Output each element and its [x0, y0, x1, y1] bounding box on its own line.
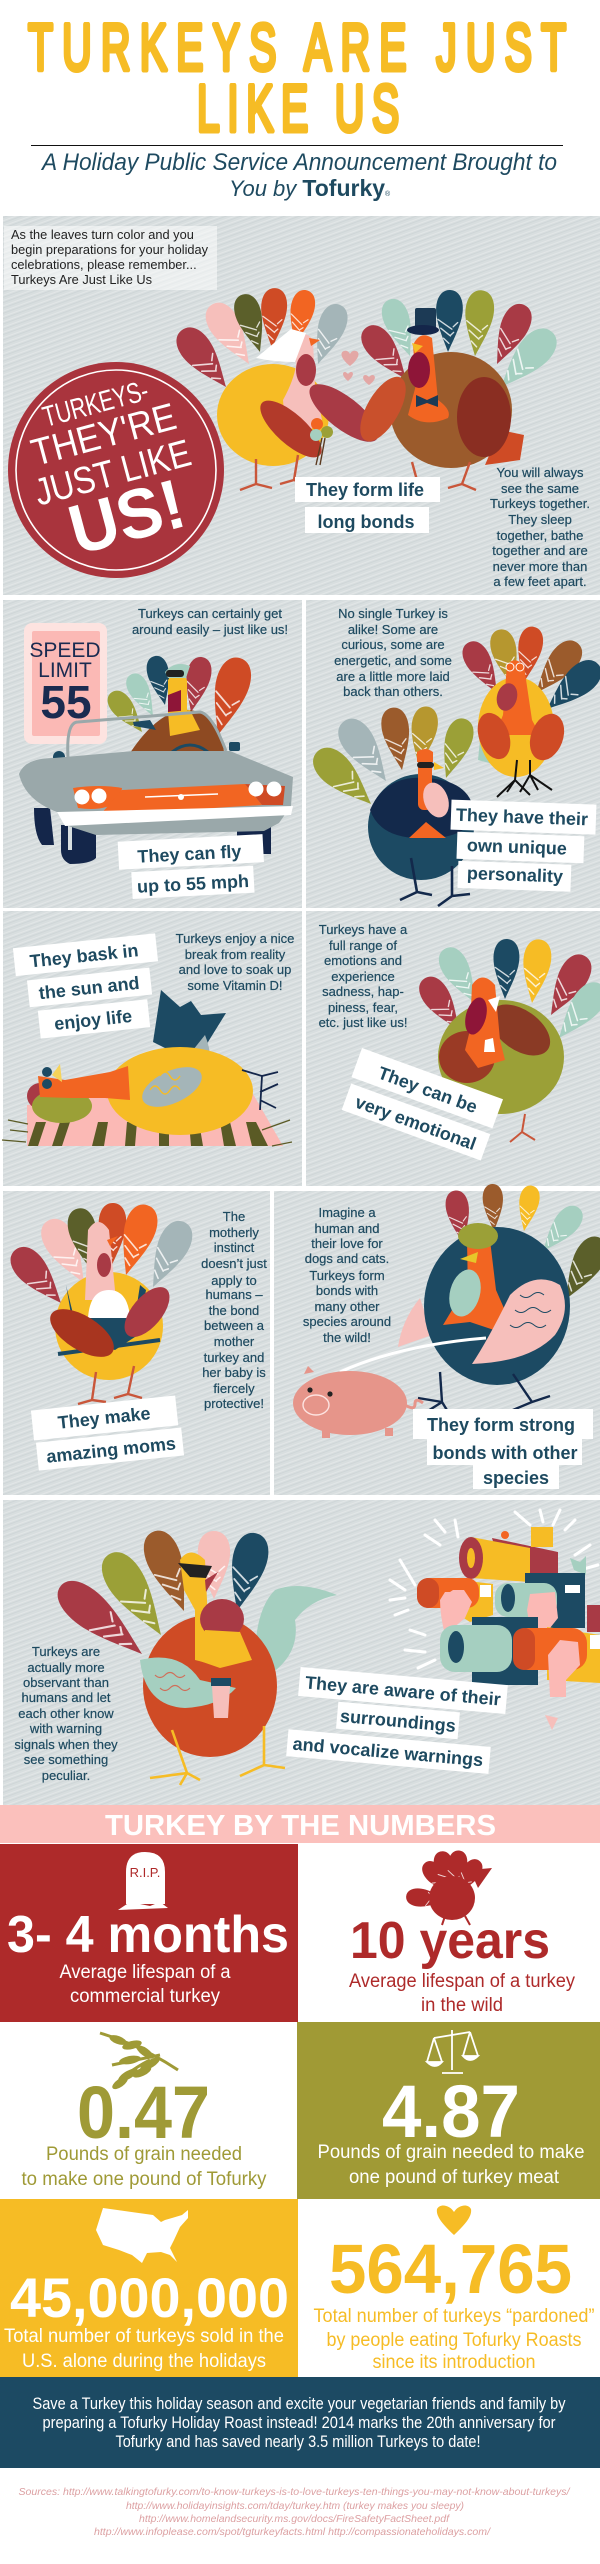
label: they have their own unique personality: They have their: [456, 805, 588, 829]
text: vitamin D: some Vitamin D!: [187, 978, 283, 993]
text: imagine a human: the wild!: [323, 1330, 371, 1345]
heading: turkey by the numbers: TURKEY BY THE NUMBERS: [105, 1810, 496, 1842]
text: vitamin D: [176, 931, 294, 993]
panel: very emotional: [306, 911, 600, 1186]
text: range of emotions: experience: [331, 969, 395, 984]
badge: THEY'RE: [27, 396, 181, 475]
text: no single turkey: are a little more laid: [336, 669, 450, 684]
label: they can be very emotional: They can be: [375, 1063, 480, 1117]
text: no single turkey: [334, 606, 452, 699]
stat: 45,000,000: U.S. alone during the holidays: [22, 2351, 266, 2372]
title: TURKEYS ARE JUST: [28, 10, 566, 84]
label: they make amazing moms: amazing moms: [45, 1433, 177, 1467]
call to action: Tofurky and has saved nearly 3.5 million Turkeys to date!: [116, 2432, 480, 2451]
text: more observant: signals when they: [14, 1737, 118, 1752]
stat: 0.47: Pounds of grain needed: [46, 2144, 242, 2165]
text: get around easily: around easily – just like us!: [132, 622, 288, 637]
sources: Sources: http://www.talkingtofurky.com/to-know-turkeys-is-to-love-turkeys-ten-things-you-may-not-know-about-turkeys/: [18, 2486, 571, 2498]
label: they can fly up to 55 mph: up to 55 mph: [137, 871, 249, 897]
text: motherly instinct: turkey and: [204, 1350, 264, 1365]
title: [28, 10, 566, 145]
text: same turkeys together: together and are: [492, 543, 588, 558]
label: they can be very emotional: [342, 1048, 503, 1160]
text: get around easily: [132, 606, 288, 637]
text: imagine a human: species around: [303, 1314, 391, 1329]
text: range of emotions: sadness, hap-: [322, 984, 404, 999]
icon: speed limit sign: SPEED: [29, 639, 101, 662]
text: imagine a human: Turkeys form: [309, 1268, 385, 1283]
text: motherly instinct: apply to: [211, 1273, 257, 1288]
text: motherly instinct: motherly: [209, 1225, 259, 1240]
call to action: [0, 2377, 600, 2468]
text: more observant: humans and let: [22, 1690, 111, 1705]
stat: 45,000,000: Total number of turkeys sold in the: [4, 2326, 284, 2347]
stat: 564,765: 564,765: [329, 2230, 572, 2308]
title: LIKE US: [197, 71, 399, 145]
label: they form strong bonds with other species: species: [483, 1468, 549, 1488]
panel: bask in the sun: [2, 911, 302, 1186]
stat: 10 years: in the wild: [421, 1995, 503, 2016]
panel: bonds with other species: [274, 1184, 600, 1495]
icon: speed limit sign: 55: [40, 676, 92, 728]
text: motherly instinct: instinct: [214, 1240, 255, 1255]
text: more observant: each other know: [18, 1706, 114, 1721]
text: same turkeys together: never more than: [493, 559, 587, 574]
stat: 0.47: to make one pound of Tofurky: [22, 2169, 267, 2190]
label: they form strong bonds with other species: bonds with other: [433, 1443, 577, 1463]
label: aware of surroundings and vocalize warnings: [286, 1667, 508, 1774]
stat: 45,000,000: 45,000,000: [10, 2266, 289, 2329]
label: they bask in the sun and enjoy life: enjoy life: [53, 1006, 133, 1034]
label: they bask in the sun and enjoy life: the sun and: [38, 973, 140, 1003]
text: motherly instinct: mother: [214, 1334, 255, 1349]
stat: 3-4 months: Average lifespan of a: [60, 1962, 231, 1983]
stat: 3-4 months: [0, 1844, 298, 2022]
panel: unique personality: [306, 600, 600, 908]
text: same turkeys together: Turkeys together.: [490, 496, 590, 511]
stat: 45,000,000: [0, 2199, 298, 2377]
panel: amazing moms: [3, 1191, 270, 1495]
label: they form strong bonds with other species: [413, 1409, 593, 1489]
text: motherly instinct: the bond: [209, 1303, 259, 1318]
label: they form life long bonds: They form life: [306, 480, 424, 500]
icon: heart: [437, 2205, 471, 2235]
label: aware of surroundings and vocalize warnings: and vocalize warnings: [292, 1734, 484, 1770]
text: same turkeys together: see the same: [501, 481, 579, 496]
stat: 0.47: 0.47: [77, 2071, 210, 2154]
stat: 10 years: Average lifespan of a turkey: [349, 1971, 575, 1992]
text: imagine a human: [303, 1205, 391, 1345]
text: more observant: see something: [24, 1752, 108, 1767]
intro text: begin preparations for your holiday: [11, 242, 209, 257]
intro text: Turkeys Are Just Like Us: [11, 272, 152, 287]
stat: 4.87: [297, 2022, 600, 2199]
icon: tombstone: R.I.P.: [130, 1865, 160, 1880]
label: they make amazing moms: They make: [57, 1403, 151, 1433]
stat: 4.87: one pound of turkey meat: [349, 2167, 560, 2188]
badge: JUST LIKE: [30, 432, 196, 514]
label: they bask in the sun and enjoy life: They bask in: [29, 940, 139, 972]
text: range of emotions: piness, fear,: [328, 1000, 398, 1015]
panel: they can fly: [3, 600, 302, 908]
illustration: driving turkey: [103, 653, 256, 753]
text: same turkeys together: You will always: [497, 465, 584, 480]
stat: 3-4 months: commercial turkey: [70, 1986, 220, 2007]
stat: 564,765: [314, 2205, 594, 2373]
label: aware of surroundings and vocalize warnings: surroundings: [339, 1706, 457, 1736]
stat: 4.87: Pounds of grain needed to make: [318, 2142, 584, 2163]
sources: http://www.infoplease.com/spot/tgturkeyfacts.html http://compassionateholidays.com/: [94, 2526, 491, 2538]
panel: life long bonds: [3, 216, 600, 595]
icon: speed limit sign: [24, 623, 107, 744]
stat: 564,765: since its introduction: [372, 2352, 536, 2373]
text: motherly instinct: her baby is: [202, 1365, 266, 1380]
text: get around easily: Turkeys can certainly get: [138, 606, 282, 621]
text: motherly instinct: between a: [204, 1318, 265, 1333]
illustration: convertible car: [19, 712, 293, 864]
illustration: emotional turkey: [413, 938, 600, 1142]
illustration: navy turkey with pig: [293, 1184, 600, 1438]
subtitle: A Holiday Public Service Announcement Brought to: [40, 149, 557, 176]
text: no single turkey: energetic, and some: [334, 653, 452, 668]
badge: US!: [61, 464, 193, 570]
label: aware of surroundings and vocalize warnings: They are aware of their: [304, 1672, 501, 1710]
text: range of emotions: full range of: [329, 938, 397, 953]
text: motherly instinct: doesn’t just: [201, 1256, 267, 1271]
text: imagine a human: bonds with: [316, 1283, 378, 1298]
label: they make amazing moms: [31, 1395, 184, 1471]
intro text: As the leaves turn color and you: [11, 227, 194, 242]
text: range of emotions: Turkeys have a: [319, 922, 408, 937]
sources: http://www.homelandsecurity.ms.gov/docs/FireSafetyFactSheet.pdf: [139, 2513, 450, 2525]
text: more observant: Turkeys are: [32, 1644, 100, 1659]
text: no single turkey: alike! Some are: [348, 622, 438, 637]
panel: aware of surroundings: [3, 1500, 600, 1805]
illustration: cameras with hands: [390, 1510, 600, 1730]
stat: 4.87: 4.87: [382, 2070, 520, 2153]
text: motherly instinct: humans –: [205, 1287, 263, 1302]
text: same turkeys together: together, bathe: [497, 528, 583, 543]
subtitle: [40, 149, 557, 201]
text: no single turkey: No single Turkey is: [338, 606, 448, 621]
text: more observant: actually more: [27, 1660, 105, 1675]
label: they can fly up to 55 mph: [118, 834, 266, 900]
sources: http://www.holidayinsights.com/tday/turkey.htm (turkey makes you sleepy): [126, 2500, 464, 2512]
icon: scales: [427, 2030, 478, 2073]
illustration: navy turkey: [306, 705, 478, 906]
text: motherly instinct: fiercely: [213, 1381, 255, 1396]
text: motherly instinct: [201, 1209, 267, 1411]
text: range of emotions: [319, 922, 408, 1030]
label: they form life long bonds: long bonds: [318, 512, 414, 532]
label: they form strong bonds with other species: They form strong: [427, 1415, 575, 1435]
illustration: groom turkey: [351, 289, 564, 492]
label: they have their own unique personality: [448, 800, 596, 893]
text: imagine a human: their love for: [311, 1236, 383, 1251]
text: imagine a human: many other: [314, 1299, 380, 1314]
heading: turkey by the numbers: [0, 1805, 600, 1843]
badge: [8, 362, 224, 578]
label: they bask in the sun and enjoy life: [13, 933, 158, 1039]
stat: 0.47: [22, 2033, 267, 2190]
icon: turkey silhouette: [405, 1849, 492, 1925]
text: no single turkey: back than others.: [343, 684, 443, 699]
text: same turkeys together: They sleep: [508, 512, 572, 527]
stat: 10 years: 10 years: [350, 1912, 550, 1970]
label: they have their own unique personality: personality: [467, 863, 563, 887]
label: they have their own unique personality: own unique: [467, 835, 567, 859]
text: no single turkey: curious, some are: [341, 637, 445, 652]
sources: [18, 2486, 571, 2538]
text: imagine a human: dogs and cats.: [305, 1251, 389, 1266]
icon: speed limit sign: LIMIT: [38, 659, 92, 682]
illustration: sunbathing turkey: [2, 990, 292, 1146]
stat: 10 years: [349, 1849, 575, 2016]
text: same turkeys together: [490, 465, 590, 589]
text: vitamin D: break from reality: [185, 947, 286, 962]
stat: 3-4 months: 3- 4 months: [7, 1906, 289, 1964]
text: range of emotions: emotions and: [324, 953, 402, 968]
intro text: [4, 226, 217, 290]
text: imagine a human: Imagine a: [318, 1205, 376, 1220]
subtitle: You by Tofurky®: [229, 175, 391, 201]
illustration: mother turkey: [4, 1201, 199, 1404]
label: they can fly up to 55 mph: They can fly: [137, 841, 242, 867]
text: vitamin D: Turkeys enjoy a nice: [176, 931, 294, 946]
icon: map of the U.S.: [96, 2208, 188, 2263]
text: range of emotions: etc. just like us!: [319, 1015, 407, 1030]
text: motherly instinct: The: [223, 1209, 245, 1224]
badge: TURKEYS-: [39, 375, 152, 434]
text: more observant: [14, 1644, 118, 1783]
label: they form life long bonds: [295, 477, 440, 533]
text: same turkeys together: a few feet apart.: [493, 574, 587, 589]
icon: hearts: [342, 351, 375, 385]
icon: tombstone: [118, 1852, 168, 1910]
illustration: observant turkey: [49, 1525, 337, 1785]
illustration: bride turkey: [169, 287, 387, 490]
text: motherly instinct: protective!: [204, 1396, 264, 1411]
label: they can be very emotional: very emotional: [353, 1092, 479, 1154]
intro text: celebrations, please remember...: [11, 257, 197, 272]
text: more observant: observant than: [23, 1675, 109, 1690]
text: more observant: with warning: [29, 1721, 102, 1736]
illustration: yellow turkey: [457, 625, 600, 797]
text: vitamin D: and love to soak up: [179, 962, 291, 977]
stat: 564,765: by people eating Tofurky Roasts: [326, 2330, 582, 2351]
text: more observant: peculiar.: [42, 1768, 90, 1783]
icon: wheat: [100, 2033, 178, 2091]
text: imagine a human: human and: [314, 1221, 380, 1236]
